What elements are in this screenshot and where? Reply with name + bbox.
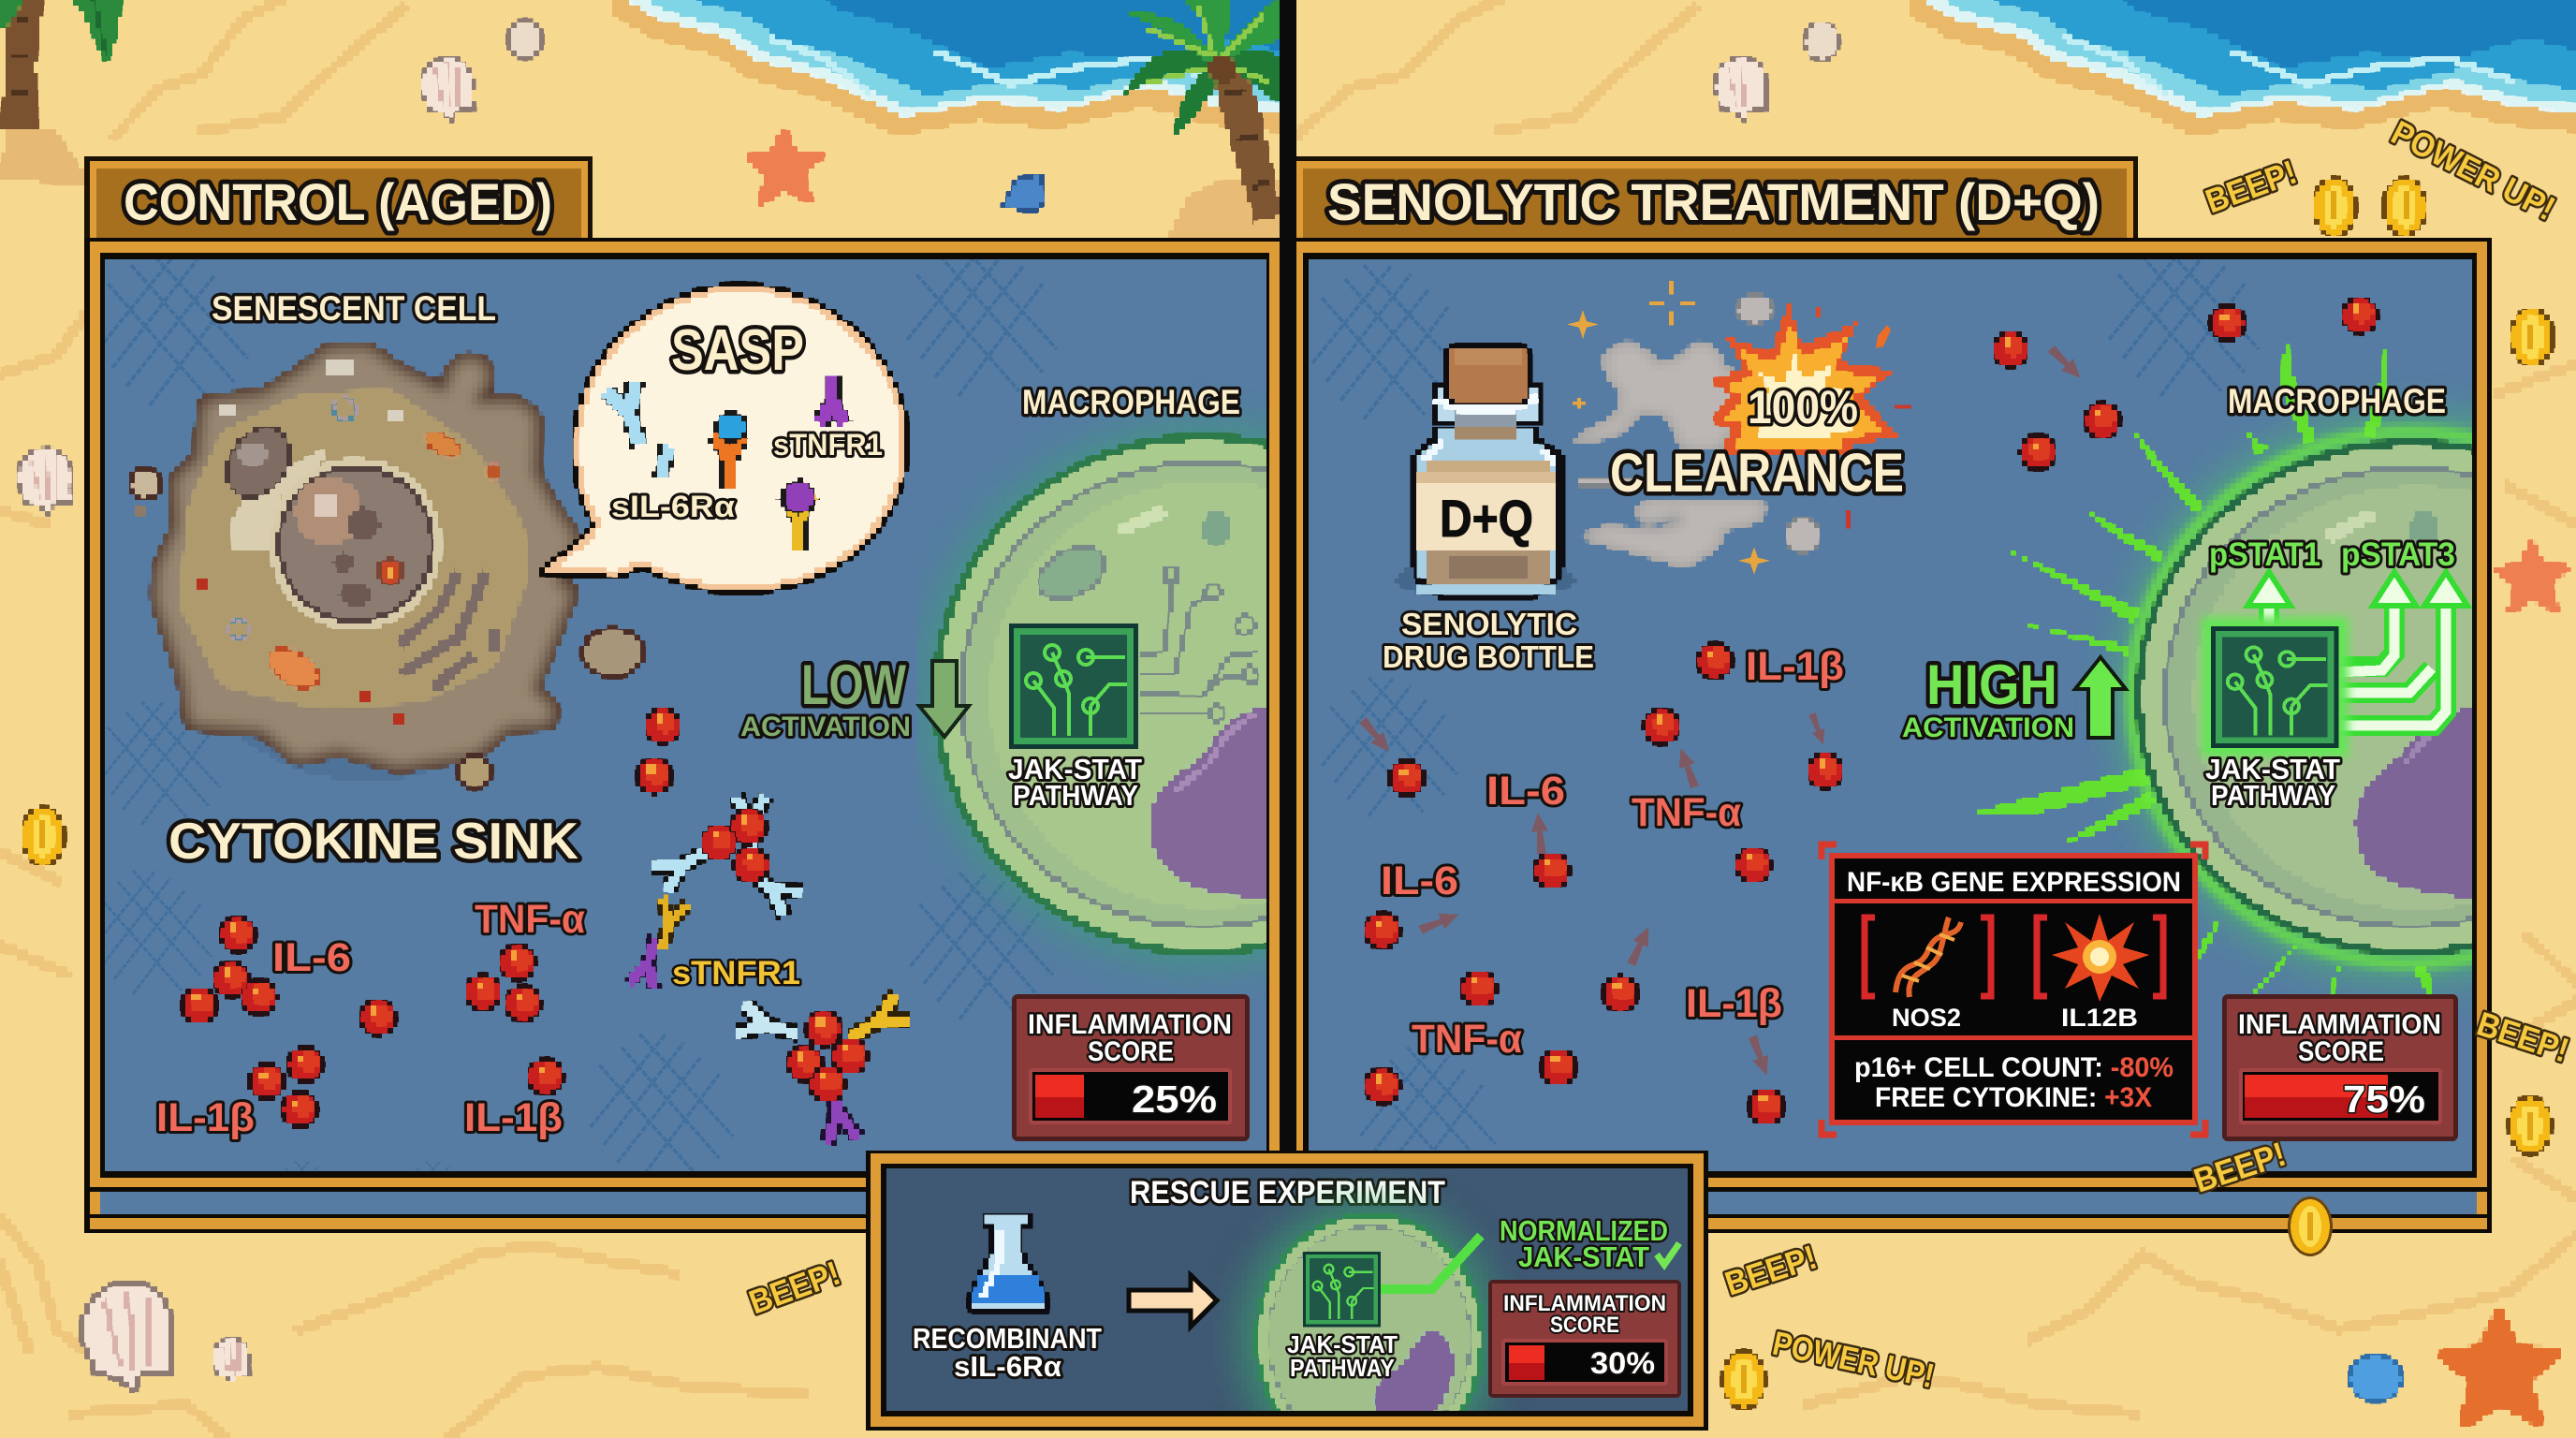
label: sIL-6Rα: sIL-6Rα [611, 490, 735, 523]
icon: DNA helix [1895, 917, 1961, 997]
label: JAK-STAT pathway [2205, 753, 2340, 812]
title tab: control: CONTROL (AGED) [124, 172, 552, 231]
senescent cell [130, 345, 643, 787]
game text: BEEP and POWER UP: POWER UP! [1769, 1324, 1938, 1395]
cytokine sink receptors [630, 797, 910, 1142]
panel: NF-κB gene expression [1822, 844, 2205, 1135]
label: recombinant sIL-6Rα: RECOMBINANT [913, 1322, 1102, 1355]
label: macrophage: MACROPHAGE [1022, 383, 1240, 421]
title tab: treatment: SENOLYTIC TREATMENT (D+Q) [1327, 172, 2100, 231]
icon: soluble receptors [606, 374, 845, 550]
coin on frame [2288, 1196, 2333, 1256]
high activation indicator: HIGH [1926, 653, 2057, 716]
smoke cloud [1572, 295, 1820, 567]
label: JAK-STAT pathway: PATHWAY [1013, 779, 1138, 812]
macrophage nucleus [1149, 708, 1273, 901]
macrophage nucleus right [2355, 708, 2481, 901]
inflammation score: 30% [1488, 1280, 1681, 1398]
panel frame [84, 238, 1280, 1233]
cytokines: free and bound [181, 707, 869, 1128]
icon: burst [2052, 914, 2149, 1002]
label: recombinant sIL-6Rα [913, 1322, 1102, 1383]
label: senolytic drug bottle: DRUG BOTTLE [1383, 639, 1594, 674]
icon: flask [967, 1214, 1050, 1313]
label: clearance: CLEARANCE [1610, 443, 1904, 504]
label: D+Q: D+Q [1440, 489, 1533, 548]
low activation indicator [740, 653, 969, 742]
label: IL-6 two: IL-6 [1381, 858, 1458, 903]
label: JAK-STAT pathway: JAK-STAT [2205, 753, 2340, 785]
label: JAK-STAT pathway [1287, 1330, 1398, 1382]
brackets [1865, 917, 2163, 996]
heading: rescue experiment: RESCUE EXPERIMENT [1130, 1175, 1445, 1211]
inflammation score: 75%: SCORE [2298, 1036, 2384, 1067]
sparkles [1567, 281, 1911, 575]
label: macrophage: MACROPHAGE [2228, 382, 2446, 420]
inflammation score: 25%: 25% [1132, 1078, 1217, 1121]
cytokines: free [1364, 297, 2378, 1125]
label: recombinant sIL-6Rα: sIL-6Rα [954, 1350, 1061, 1383]
label: JAK-STAT pathway: PATHWAY [1290, 1354, 1395, 1382]
inflammation score: 30%: INFLAMMATION [1503, 1291, 1666, 1316]
label: IL-1β top: IL-1β [1746, 644, 1844, 689]
label: senolytic drug bottle: SENOLYTIC [1401, 607, 1577, 641]
arrow: rescue flow [1129, 1275, 1217, 1327]
inflammation score: 75%: INFLAMMATION [2238, 1009, 2441, 1040]
explosion [1709, 303, 1898, 456]
game text: BEEP and POWER UP: POWER UP! [2385, 113, 2561, 227]
inflammation score: 30%: 30% [1590, 1346, 1655, 1380]
label: 100%: 100% [1748, 381, 1858, 433]
panel: rescue experiment [866, 1151, 1708, 1438]
inflammation score: 25%: INFLAMMATION [1028, 1009, 1232, 1040]
label: senescent cell: SENESCENT CELL [212, 289, 496, 328]
low activation indicator: LOW [801, 653, 906, 716]
stat: p16 cell count: p16+ CELL COUNT: -80% [1854, 1052, 2174, 1083]
heading: cytokine sink: CYTOKINE SINK [168, 812, 578, 870]
label: IL-1β: IL-1β [156, 1095, 255, 1140]
label: TNF-α: TNF-α [475, 897, 585, 942]
label: JAK-STAT pathway: JAK-STAT [1008, 753, 1142, 785]
label: TNF-α one: TNF-α [1632, 790, 1741, 835]
panel frame [1296, 238, 2492, 1233]
icon: JAK-STAT chip [1009, 624, 1138, 749]
title tab: control [84, 156, 593, 245]
label: IL12B: IL12B [2061, 1004, 2138, 1032]
high activation indicator: ACTIVATION [1902, 712, 2074, 743]
game text: BEEP and POWER UP: BEEP! [744, 1254, 845, 1322]
icon: JAK-STAT chip small [1303, 1252, 1381, 1327]
label: IL-6: IL-6 [272, 935, 351, 980]
label: NOS2: NOS2 [1892, 1004, 1961, 1032]
label: pSTAT3: pSTAT3 [2341, 536, 2455, 573]
inflammation score: 30%: SCORE [1550, 1313, 1619, 1338]
centre divider [1280, 0, 1296, 1311]
game text: BEEP and POWER UP: BEEP! [2189, 1135, 2291, 1200]
game text: BEEP and POWER UP [744, 113, 2573, 1395]
label: IL-1β bottom: IL-1β [1686, 981, 1782, 1026]
beach props: starfish [749, 132, 2566, 1423]
label: JAK-STAT pathway: JAK-STAT [1287, 1330, 1398, 1358]
label: JAK-STAT pathway: PATHWAY [2211, 779, 2335, 812]
title tab: treatment [1296, 156, 2138, 245]
icon: JAK-STAT chip active [2202, 617, 2349, 757]
palm tree left [0, 0, 122, 187]
label: normalized JAK-STAT [1500, 1214, 1679, 1273]
label: IL-1β second: IL-1β [464, 1095, 563, 1140]
panel: senolytic treatment (D+Q) [1296, 156, 2576, 1233]
low activation indicator: ACTIVATION [740, 712, 911, 742]
macrophage rescued [1242, 1202, 1497, 1438]
glowing pathway arrows [2247, 572, 2467, 726]
label: TNF-α two: TNF-α [1412, 1017, 1522, 1062]
inflammation score: 75% [2222, 994, 2458, 1141]
label: JAK-STAT pathway [1008, 753, 1142, 812]
macrophage cell [917, 411, 1266, 977]
game text: BEEP and POWER UP: BEEP! [1720, 1238, 1822, 1303]
panel: control (aged) [84, 156, 1280, 1233]
label: pSTAT1: pSTAT1 [2209, 536, 2320, 573]
label: sTNFR1 yellow: sTNFR1 [672, 955, 800, 991]
label: SASP: SASP [671, 318, 804, 383]
label: IL-6 one: IL-6 [1486, 769, 1565, 814]
connector: normalized line [1381, 1236, 1481, 1289]
label: senolytic drug bottle [1383, 607, 1594, 674]
inflammation score: 25% [1012, 994, 1250, 1141]
high activation indicator [1902, 653, 2126, 743]
palm tree right of left scene [1125, 0, 1282, 253]
callout: SASP speech bubble [550, 289, 903, 588]
label: normalized JAK-STAT: NORMALIZED [1500, 1214, 1668, 1247]
green energy rays [1961, 332, 2434, 994]
label: normalized JAK-STAT: JAK-STAT [1518, 1240, 1649, 1273]
inflammation score: 75%: 75% [2343, 1078, 2425, 1121]
game text: BEEP and POWER UP: BEEP! [2201, 153, 2302, 221]
inflammation score: 25%: SCORE [1088, 1036, 1174, 1067]
stat: free cytokine: FREE CYTOKINE: +3X [1875, 1082, 2152, 1113]
macrophage activated [1961, 332, 2576, 994]
heading: NF-κB gene expression: NF-κB GENE EXPRESSION [1847, 867, 2181, 898]
cytokine motion arrows [1356, 343, 2086, 1078]
label: sTNFR1: sTNFR1 [773, 428, 883, 462]
icon: D+Q drug bottle [1396, 346, 1575, 599]
